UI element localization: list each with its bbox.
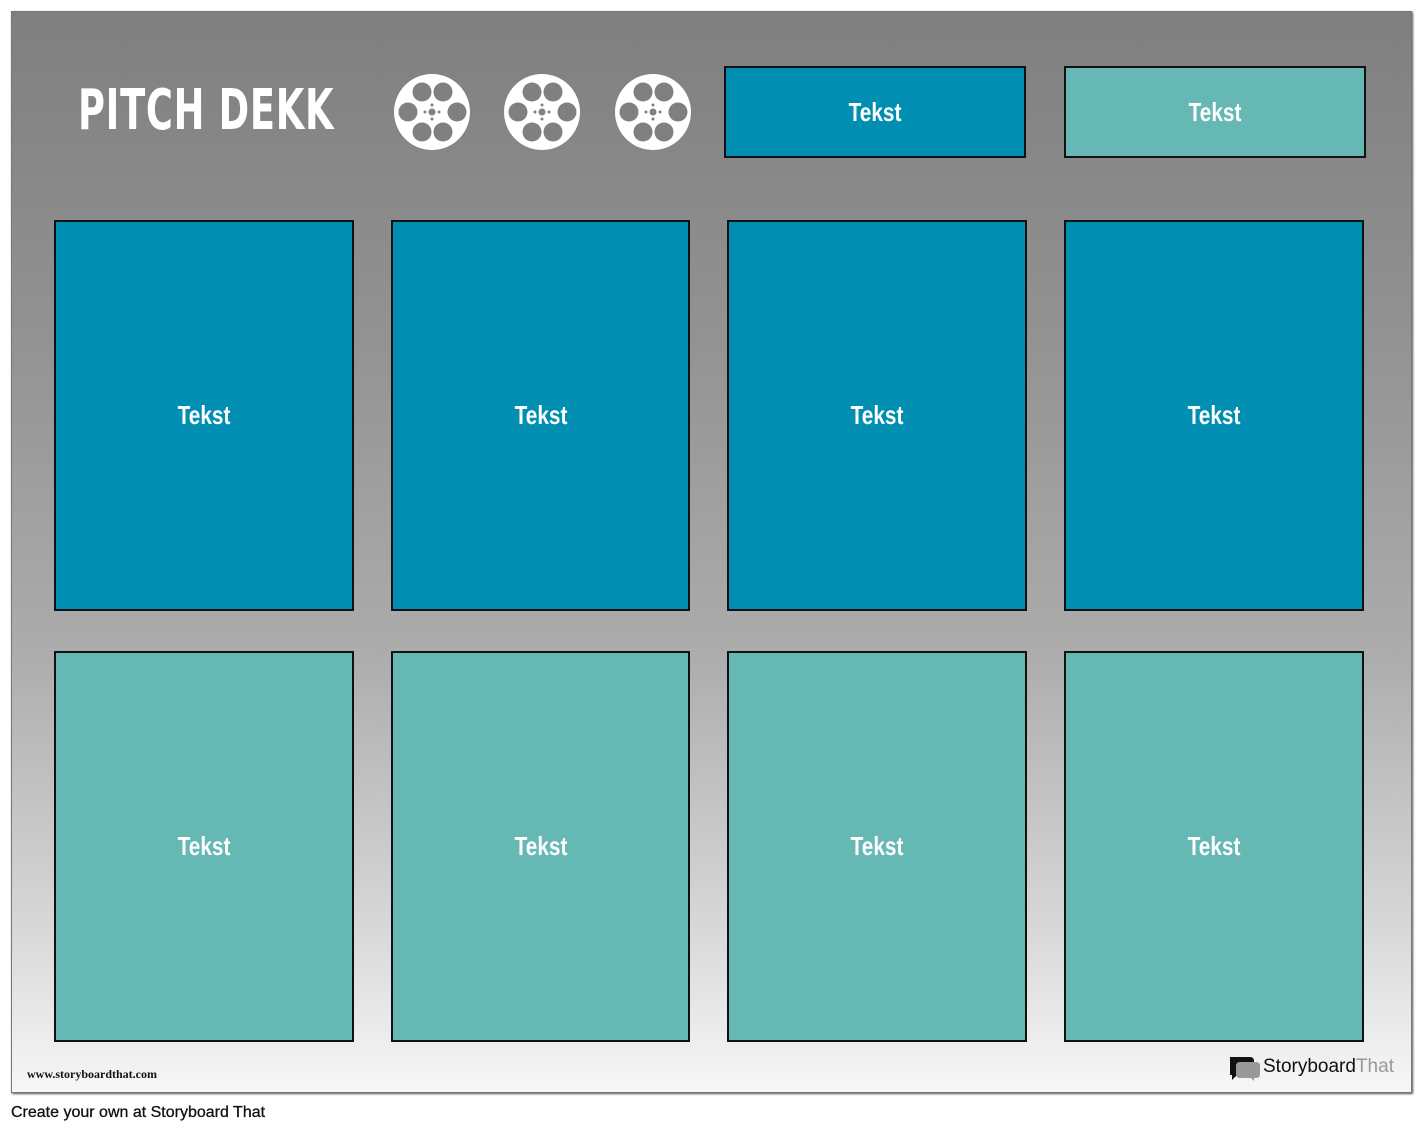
footer url: www.storyboardthat.com <box>27 1067 157 1081</box>
icons: film reels <box>394 74 691 150</box>
panel row 2 col 1: Tekst <box>178 831 230 861</box>
panel row 1 col 2: Tekst <box>514 400 567 430</box>
panel row 1 col 4 <box>1064 220 1364 611</box>
bottom caption: Create your own at Storyboard That <box>11 1104 265 1121</box>
panel row 2 col 2 <box>391 651 690 1042</box>
panel row 1 col 1 <box>54 220 354 611</box>
icon: reel 2 <box>504 74 580 150</box>
panel row 2 col 4 <box>1064 651 1364 1042</box>
panel row 1 col 3: Tekst <box>851 400 903 430</box>
panel row 2 col 3 <box>727 651 1027 1042</box>
header box teal: Tekst <box>1189 96 1241 126</box>
panel row 1 col 3 <box>727 220 1027 611</box>
panel row 1 col 2 <box>391 220 690 611</box>
panel row 1 col 4: Tekst <box>1188 400 1240 430</box>
icon: reel 1 <box>394 74 470 150</box>
logo: StoryboardThat <box>1263 1056 1394 1077</box>
title: PITCH DEKK <box>78 78 334 143</box>
panel row 1 col 1: Tekst <box>178 400 230 430</box>
panel row 2 col 2: Tekst <box>514 831 567 861</box>
logo <box>1230 1056 1394 1081</box>
header box teal <box>1064 66 1366 158</box>
header box blue <box>724 66 1026 158</box>
panel row 2 col 3: Tekst <box>851 831 903 861</box>
panel row 2 col 1 <box>54 651 354 1042</box>
icon: reel 3 <box>615 74 691 150</box>
panel row 2 col 4: Tekst <box>1188 831 1240 861</box>
header box blue: Tekst <box>849 96 901 126</box>
